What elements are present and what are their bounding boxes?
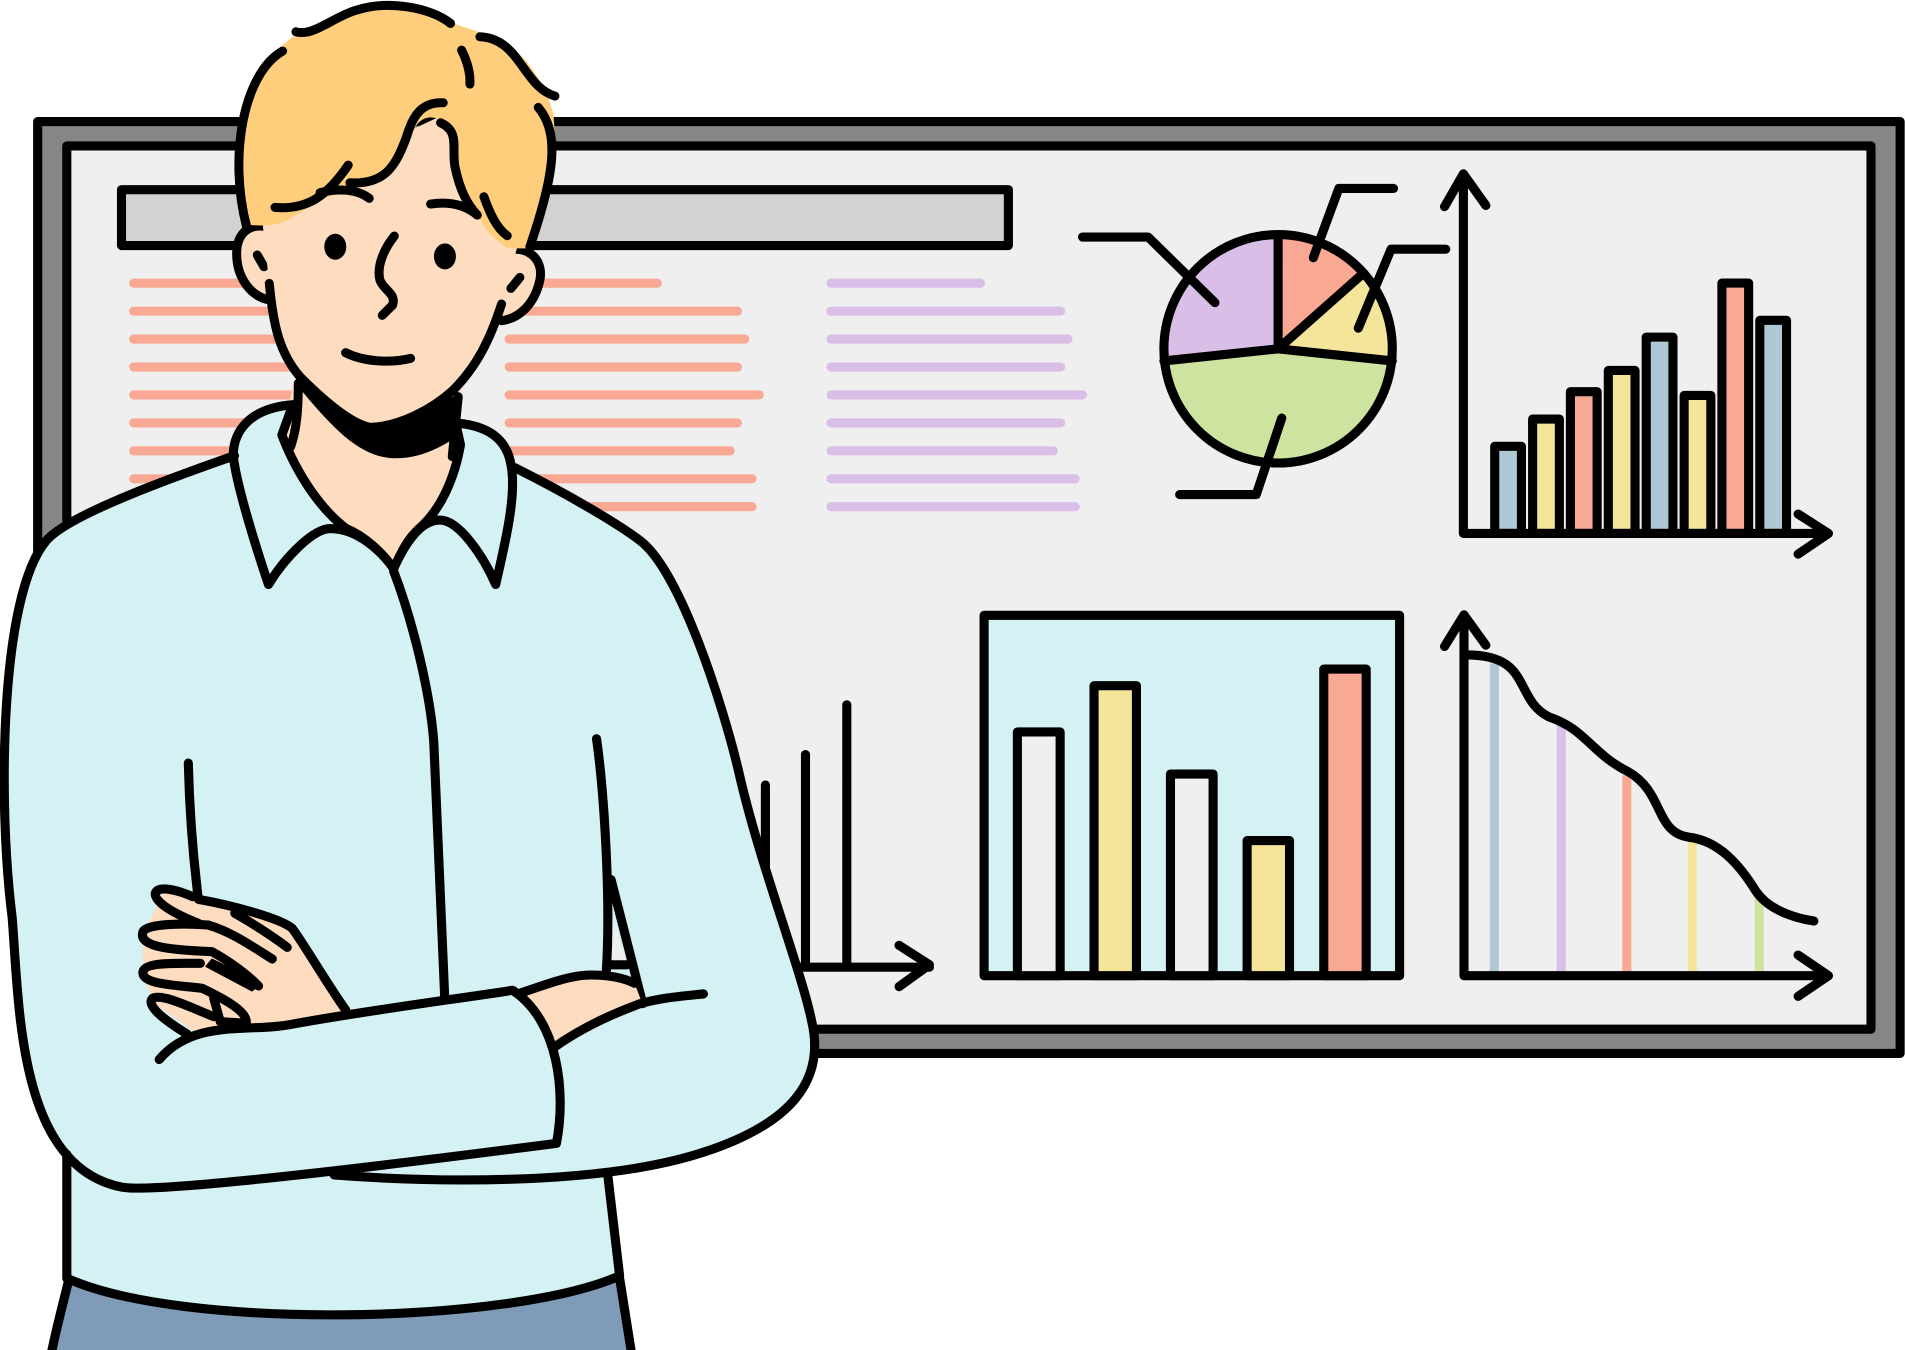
face <box>260 113 527 427</box>
shirt body <box>4 456 815 1315</box>
hair <box>239 5 554 248</box>
sleeve and left arm outline <box>4 456 560 1188</box>
ears <box>237 226 541 321</box>
cuff line <box>554 994 703 1047</box>
forearm sleeve <box>73 990 560 1188</box>
pie chart <box>1163 235 1393 463</box>
eyes <box>324 234 456 269</box>
gap behind arm <box>607 920 627 965</box>
figure: man <box>4 5 815 1350</box>
pie leader lines <box>1082 188 1446 495</box>
shirt outlines <box>67 468 815 1315</box>
bar chart: partly hidden bottom left <box>765 705 929 987</box>
hair outlines <box>239 5 555 247</box>
text block: salmon lines centre <box>504 283 759 507</box>
bar chart: centre panel <box>984 615 1400 976</box>
line chart: bottom right <box>1445 615 1828 996</box>
head <box>237 5 555 457</box>
mouth <box>346 353 411 361</box>
jaw <box>269 283 502 427</box>
trousers <box>51 1278 632 1350</box>
bar chart: top right <box>1445 174 1828 554</box>
hand <box>142 888 346 1034</box>
text block: salmon lines left <box>134 283 292 479</box>
neck lines <box>291 383 458 457</box>
collar <box>233 405 513 584</box>
neck <box>282 365 462 569</box>
arm lines and wrist <box>142 888 642 1050</box>
wrist behind sleeve <box>518 975 642 1050</box>
text block: purple lines <box>831 283 1082 507</box>
neck shadow <box>298 383 457 456</box>
heading bar <box>121 190 1008 246</box>
panel: presentation board <box>38 122 1900 1053</box>
nose <box>379 236 394 315</box>
eyebrows <box>320 190 477 215</box>
